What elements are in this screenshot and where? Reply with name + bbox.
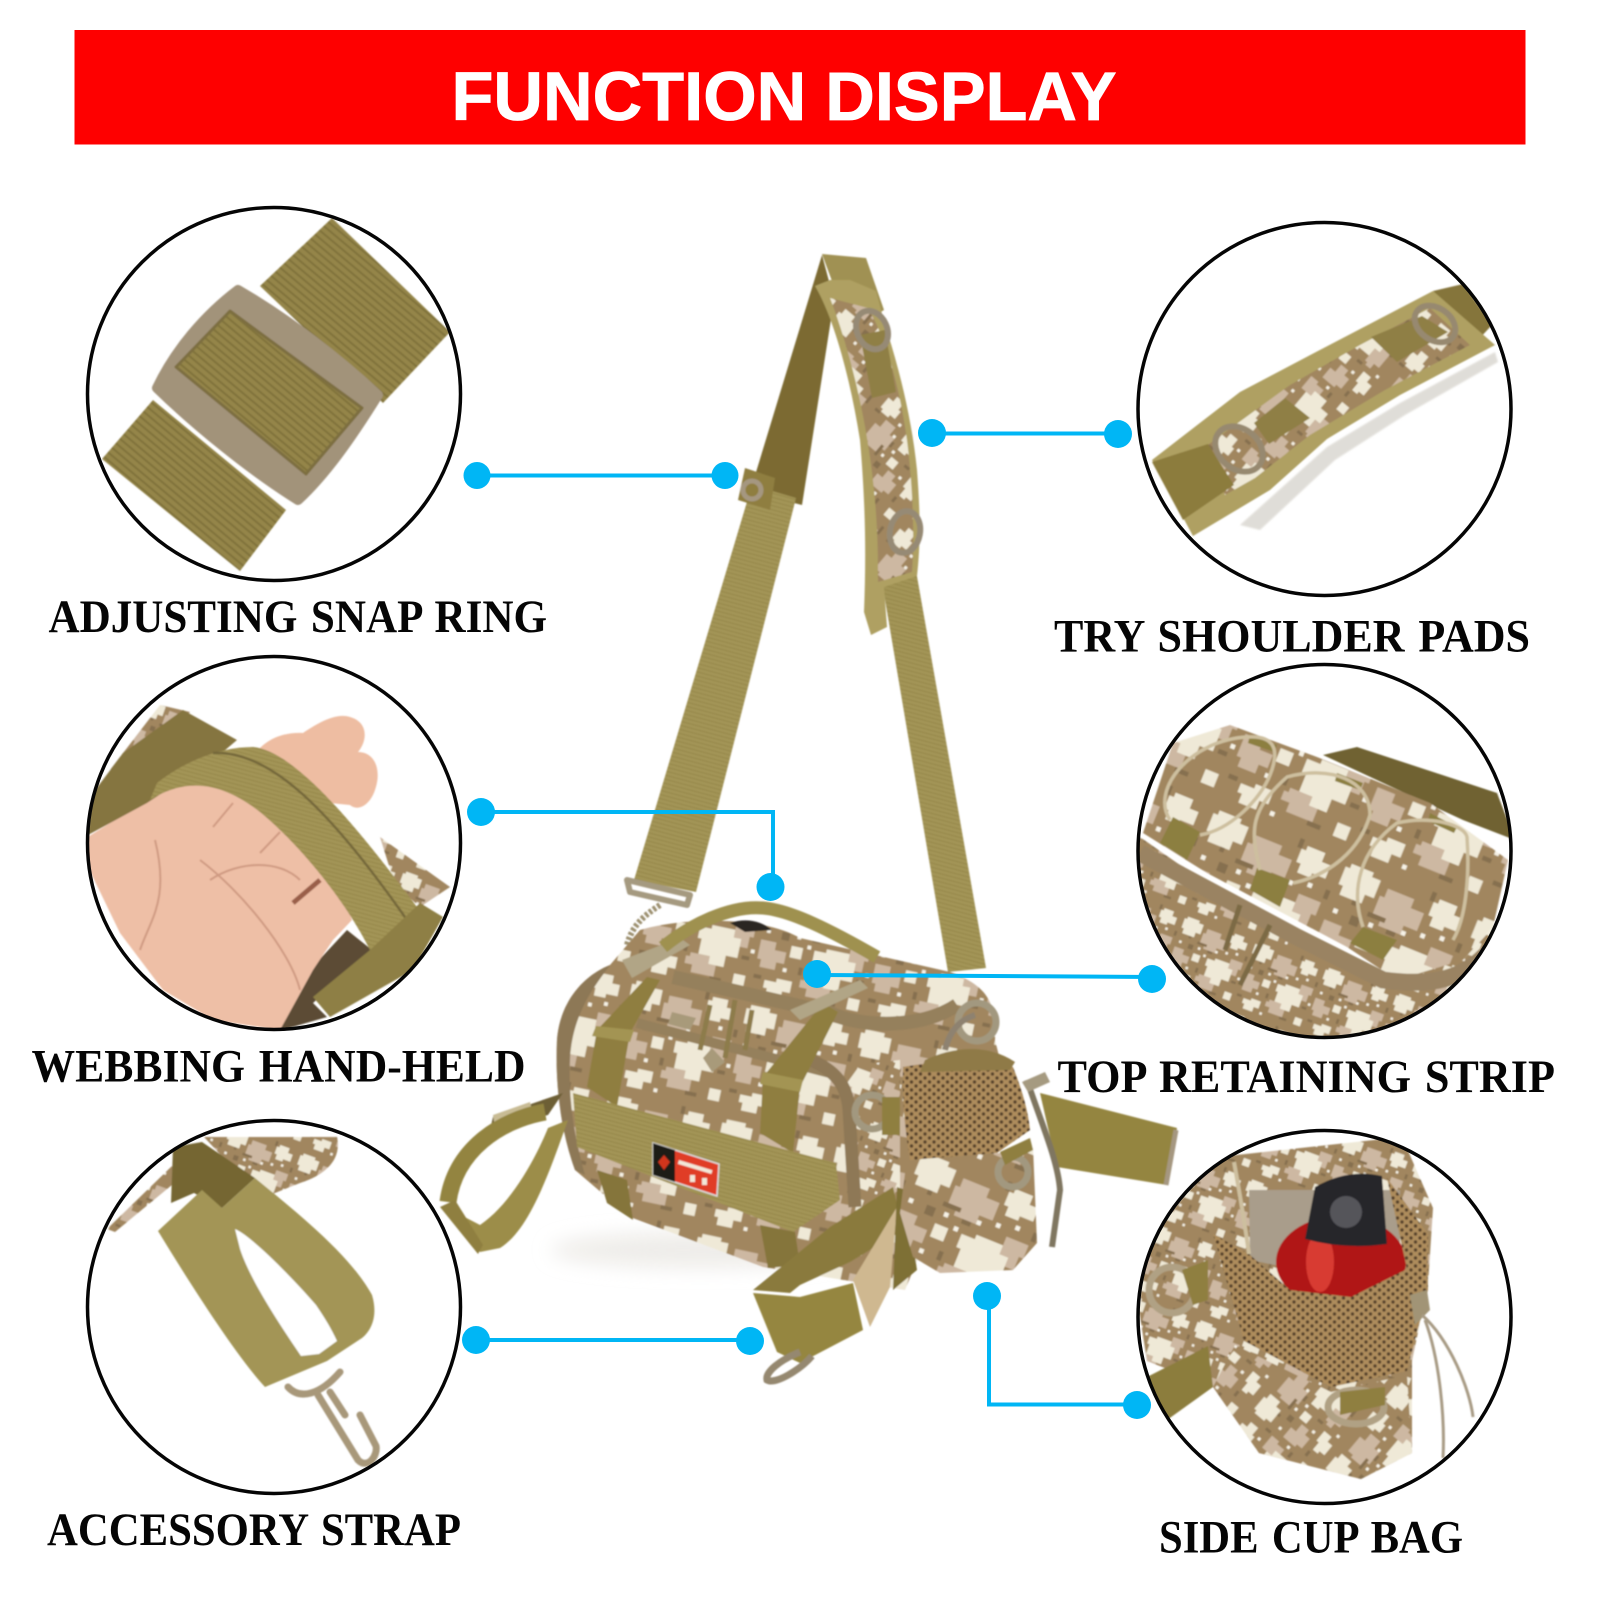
label: webbing hand-held: WEBBING HAND-HELD — [32, 1040, 526, 1092]
connector: side cup bag — [973, 1282, 1151, 1419]
panel: adjusting snap ring close-up — [88, 208, 460, 580]
connector: accessory strap — [462, 1326, 764, 1355]
label: adjusting snap ring: ADJUSTING SNAP RING — [48, 591, 547, 643]
panel: accessory strap close-up — [88, 1120, 460, 1494]
main product: tactical camo shoulder bag — [440, 254, 1177, 1381]
label: side cup bag: SIDE CUP BAG — [1159, 1512, 1463, 1564]
connector: top retaining strip — [803, 960, 1166, 993]
connector: shoulder pads — [918, 419, 1132, 448]
title banner — [74, 30, 1526, 144]
connector: webbing hand-held — [467, 798, 784, 901]
label: try shoulder pads: TRY SHOULDER PADS — [1054, 610, 1530, 662]
panel: shoulder pad close-up — [1138, 222, 1511, 596]
panel: top retaining strip close-up — [1130, 664, 1515, 1050]
panel: webbing hand-held close-up — [86, 656, 460, 1035]
brand patch — [653, 1143, 719, 1196]
label: accessory strap: ACCESSORY STRAP — [47, 1504, 461, 1556]
connector: adjusting snap ring — [464, 462, 738, 489]
panel: side cup bag close-up — [1138, 1130, 1511, 1504]
title banner: FUNCTION DISPLAY — [452, 58, 1116, 135]
label: top retaining strip: TOP RETAINING STRIP — [1058, 1051, 1555, 1103]
